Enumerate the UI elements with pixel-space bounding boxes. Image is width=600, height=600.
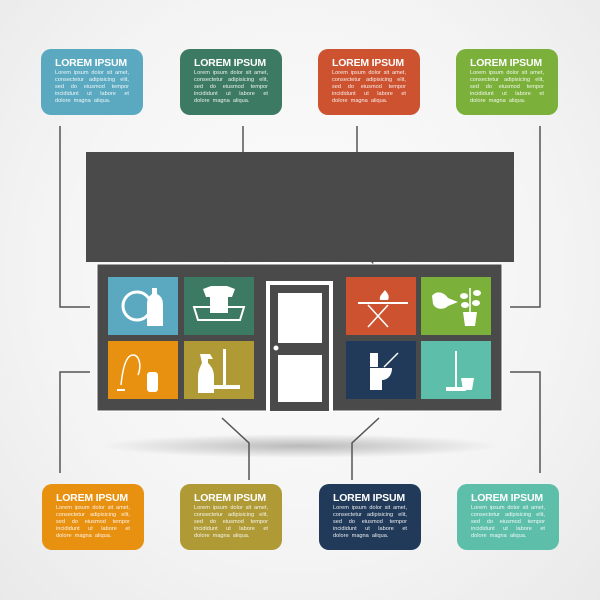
- info box 2: consectetur adipisicing elit,: [194, 77, 268, 83]
- info box 7: Lorem ipsum dolor sit amet,: [333, 505, 407, 511]
- info box 5: [42, 484, 144, 550]
- info box 6: sed do eiusmod tempor: [194, 519, 268, 525]
- info box 2: Lorem ipsum dolor sit amet,: [194, 70, 268, 76]
- info box 6: incididunt ut labore et: [194, 526, 268, 532]
- info box 4: incididunt ut labore et: [470, 91, 544, 97]
- info box 4: consectetur adipisicing elit,: [470, 77, 544, 83]
- info box 5: incididunt ut labore et: [56, 526, 130, 532]
- info box 7: [319, 484, 421, 550]
- info box 2: sed do eiusmod tempor: [194, 84, 268, 90]
- info box 1: Lorem ipsum dolor sit amet,: [55, 70, 129, 76]
- door: [266, 281, 333, 411]
- info box 1: LOREM IPSUM: [55, 57, 127, 69]
- info box 1: consectetur adipisicing elit,: [55, 77, 129, 83]
- info box 5: Lorem ipsum dolor sit amet,: [56, 505, 130, 511]
- info box 3: LOREM IPSUM: [332, 57, 404, 69]
- tiles: [108, 277, 178, 335]
- info box 6: consectetur adipisicing elit,: [194, 512, 268, 518]
- info box 6: dolore magna aliqua.: [194, 533, 249, 539]
- info box 3: [318, 49, 420, 115]
- info box 8: consectetur adipisicing elit,: [471, 512, 545, 518]
- info box 3: sed do eiusmod tempor: [332, 84, 406, 90]
- info box 6: Lorem ipsum dolor sit amet,: [194, 505, 268, 511]
- info box 2: [180, 49, 282, 115]
- info box 3: Lorem ipsum dolor sit amet,: [332, 70, 406, 76]
- info box 6: [180, 484, 282, 550]
- info box 2: LOREM IPSUM: [194, 57, 266, 69]
- info box 7: LOREM IPSUM: [333, 492, 405, 504]
- roof: [86, 152, 514, 262]
- info box 8: incididunt ut labore et: [471, 526, 545, 532]
- info box 4: sed do eiusmod tempor: [470, 84, 544, 90]
- info box 1: sed do eiusmod tempor: [55, 84, 129, 90]
- info box 8: Lorem ipsum dolor sit amet,: [471, 505, 545, 511]
- info box 4: dolore magna aliqua.: [470, 98, 525, 104]
- info box 1: incididunt ut labore et: [55, 91, 129, 97]
- info box 7: incididunt ut labore et: [333, 526, 407, 532]
- icons: [117, 286, 481, 393]
- info box 5: LOREM IPSUM: [56, 492, 128, 504]
- info box 3: consectetur adipisicing elit,: [332, 77, 406, 83]
- info box 4: Lorem ipsum dolor sit amet,: [470, 70, 544, 76]
- info box 8: dolore magna aliqua.: [471, 533, 526, 539]
- info box 3: dolore magna aliqua.: [332, 98, 387, 104]
- info box 4: LOREM IPSUM: [470, 57, 542, 69]
- info box 8: [457, 484, 559, 550]
- info box 1: [41, 49, 143, 115]
- info box 2: dolore magna aliqua.: [194, 98, 249, 104]
- info box 2: incididunt ut labore et: [194, 91, 268, 97]
- info box 1: dolore magna aliqua.: [55, 98, 110, 104]
- info box 4: [456, 49, 558, 115]
- shadow: [100, 434, 500, 458]
- info box 6: LOREM IPSUM: [194, 492, 266, 504]
- info box 8: sed do eiusmod tempor: [471, 519, 545, 525]
- info box 7: dolore magna aliqua.: [333, 533, 388, 539]
- info box 8: LOREM IPSUM: [471, 492, 543, 504]
- info box 5: sed do eiusmod tempor: [56, 519, 130, 525]
- connector lines: [60, 126, 540, 480]
- info box 7: consectetur adipisicing elit,: [333, 512, 407, 518]
- house body: [97, 264, 502, 411]
- info box 5: dolore magna aliqua.: [56, 533, 111, 539]
- info box 3: incididunt ut labore et: [332, 91, 406, 97]
- info box 5: consectetur adipisicing elit,: [56, 512, 130, 518]
- info box 7: sed do eiusmod tempor: [333, 519, 407, 525]
